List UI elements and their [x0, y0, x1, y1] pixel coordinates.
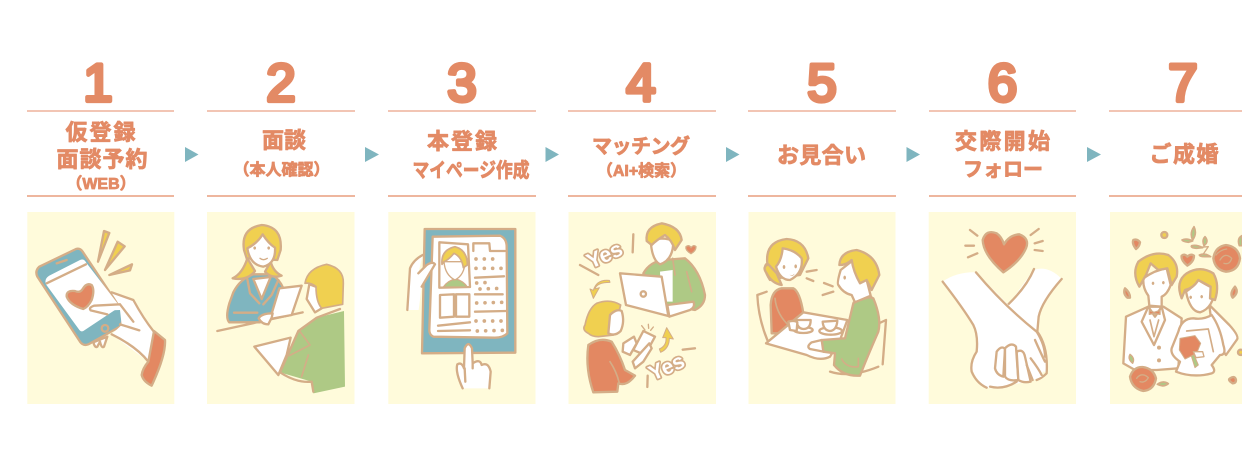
step 6 background [929, 212, 1076, 404]
step 4 background [568, 212, 716, 404]
step 4 number: 4 [626, 54, 656, 113]
step 2 panel [207, 54, 355, 404]
step 3 heading: マイページ作成 [412, 158, 530, 182]
step 4 heading: （AI+検索） [597, 161, 686, 180]
step 3 heading: 本登録 [427, 129, 497, 154]
step 6 heading [955, 129, 1050, 181]
step 6 heading: 交際開始 [955, 129, 1050, 154]
step 5 panel [748, 54, 896, 404]
icon: interview [217, 225, 345, 393]
arrow 1 [185, 147, 198, 162]
icon: wedding couple [1123, 227, 1242, 391]
step 2 heading: （本人確認） [233, 160, 330, 179]
step 6 heading: フォロー [963, 159, 1043, 181]
step 7 panel [1109, 54, 1242, 404]
step 1 heading [56, 120, 148, 193]
step 2 heading: 面談 [262, 128, 306, 153]
icon: phone and hand [36, 231, 165, 386]
arrow 2 [365, 147, 379, 162]
step 1 number: 1 [83, 54, 113, 113]
step 7 background [1110, 212, 1242, 404]
step 2 background [207, 212, 354, 404]
arrow 4 [726, 147, 740, 162]
step 4 heading [592, 134, 690, 180]
step 3 background [388, 212, 536, 404]
step 1 heading: 仮登録 [66, 120, 136, 145]
Yes upper: Yes [583, 237, 626, 274]
icon: meeting at table [757, 239, 886, 376]
step 3 heading [412, 129, 530, 182]
step 3 panel [388, 54, 536, 404]
step 5 heading: お見合い [777, 143, 866, 168]
step 1 heading: 面談予約 [56, 147, 148, 172]
step 7 heading: ご成婚 [1150, 142, 1218, 167]
icon: holding hands with heart [943, 229, 1062, 388]
step 6 panel [929, 54, 1076, 404]
arrow 5 [906, 147, 920, 162]
step 1 panel [27, 54, 174, 404]
step 4 heading: マッチング [592, 134, 690, 158]
icon: tablet profile [407, 229, 515, 388]
step 5 number: 5 [807, 54, 837, 113]
step 6 number: 6 [988, 54, 1017, 113]
Yes lower: Yes [645, 349, 688, 386]
step 5 background [748, 212, 896, 404]
icon: matching [580, 223, 705, 392]
step 3 number: 3 [447, 54, 477, 113]
step 2 number: 2 [266, 54, 296, 113]
step 4 panel [568, 54, 716, 404]
step 7 number: 7 [1168, 54, 1198, 113]
step 2 heading [233, 128, 330, 179]
arrow 6 [1087, 147, 1101, 162]
step 1 heading: （WEB） [66, 175, 136, 193]
arrow 3 [546, 147, 559, 162]
step 1 background [27, 212, 174, 404]
